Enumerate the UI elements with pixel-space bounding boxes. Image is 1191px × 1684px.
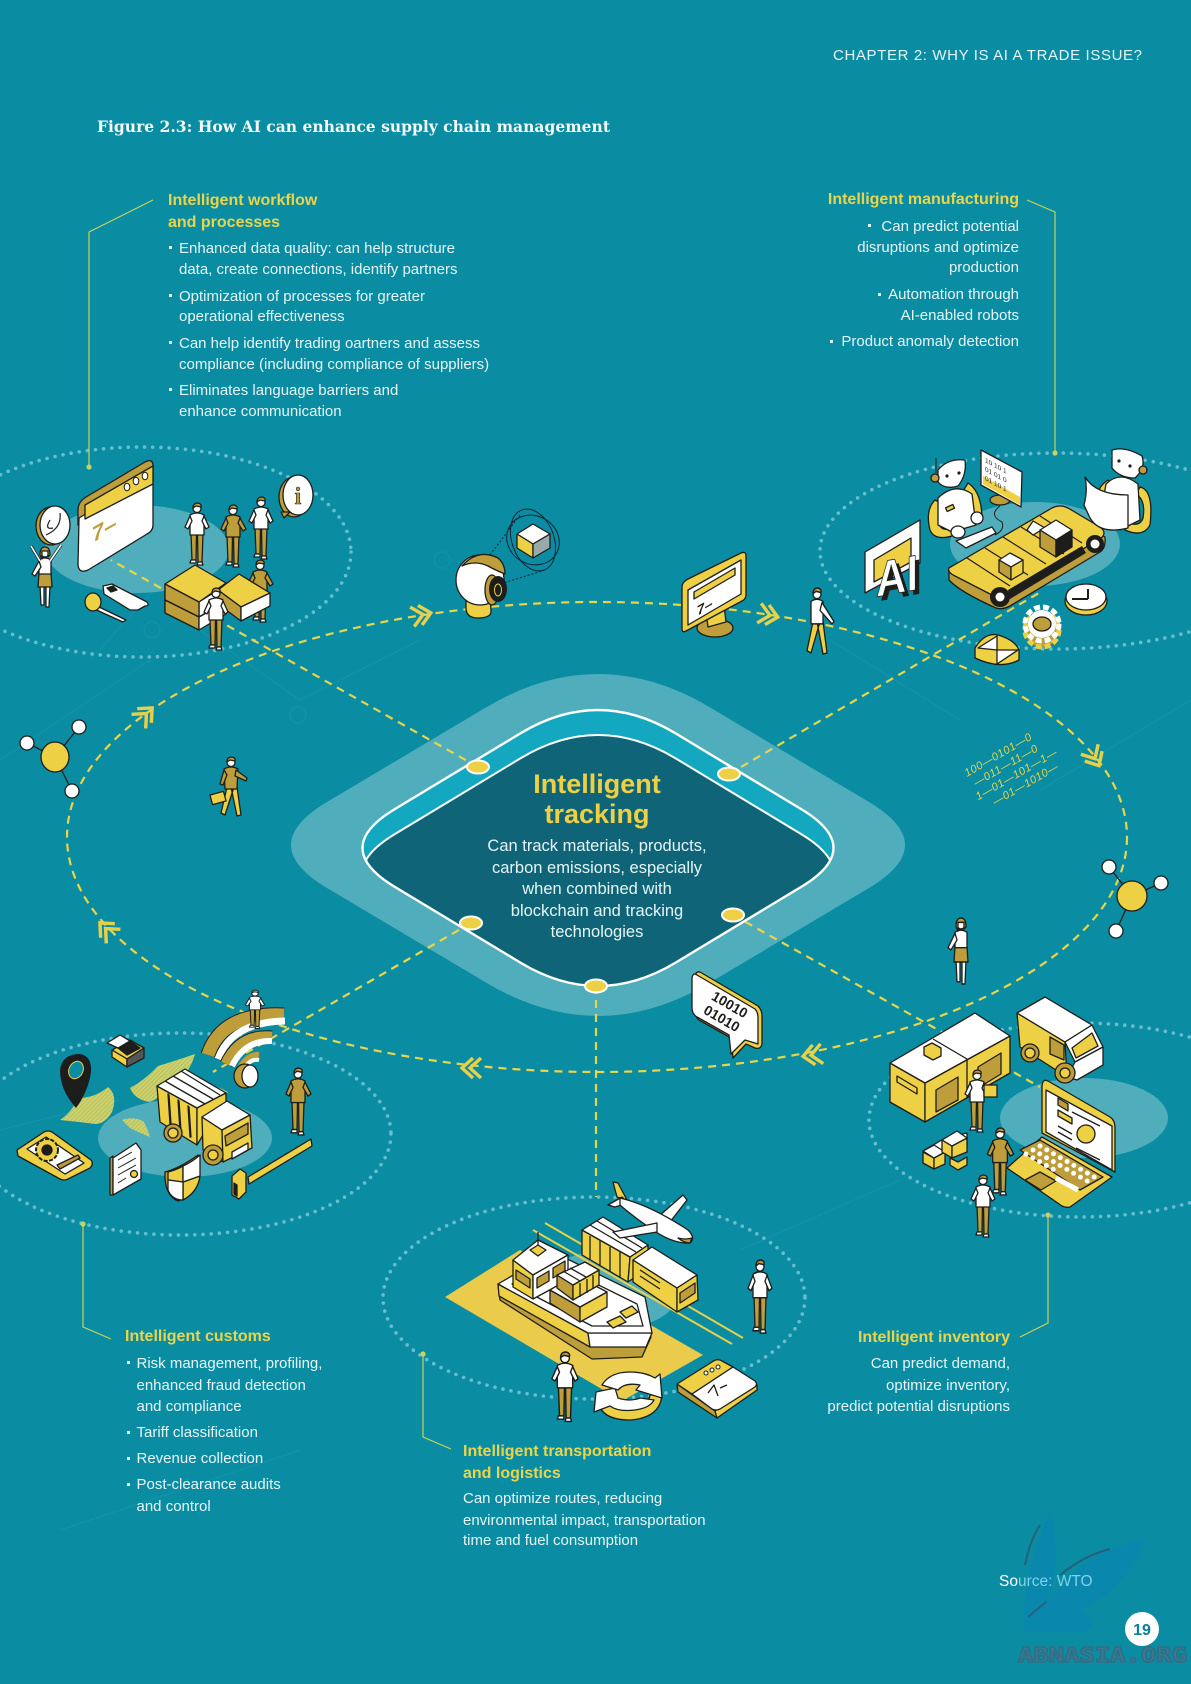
bullets: AI-enabled robots — [901, 307, 1019, 324]
centre description — [487, 837, 707, 941]
conveyor belt — [949, 506, 1105, 609]
cycle arrows — [594, 1372, 662, 1420]
robot with blueprint — [1084, 449, 1151, 533]
stand — [697, 619, 733, 637]
centre description: technologies — [551, 923, 643, 941]
data screen: 01 10 1 — [985, 475, 1007, 494]
body — [827, 1355, 1010, 1415]
binary stream: 1—01—101—1— — [974, 746, 1060, 803]
pale pad: workflow — [45, 505, 229, 593]
inspector man — [286, 1068, 311, 1135]
body: optimize inventory, — [886, 1377, 1010, 1394]
faint network pattern — [0, 540, 1191, 1530]
binary speech bubble — [692, 972, 762, 1058]
world map — [60, 1054, 228, 1137]
connector — [423, 1354, 451, 1449]
binary stream: 100—0101—0 — [963, 731, 1035, 780]
centre heading: Intelligent — [533, 769, 661, 799]
cube — [517, 524, 550, 558]
prompt glyph: 7– — [697, 595, 713, 620]
ring outline — [362, 710, 834, 986]
bullets — [127, 1355, 322, 1515]
lower containers — [550, 1290, 580, 1322]
pale pad: inventory — [1000, 1078, 1168, 1158]
application window — [78, 461, 153, 571]
walking man with briefcase — [210, 757, 247, 816]
centre description: carbon emissions, especially — [492, 859, 703, 877]
people at laptop — [971, 1128, 1014, 1237]
data screen: 10 10 1 — [985, 457, 1007, 476]
binary stream — [961, 724, 1067, 814]
dashed link: manufacturing to hub — [729, 593, 1039, 774]
chevron arrows on loop — [93, 603, 1108, 1078]
watermark butterfly — [1024, 1512, 1145, 1632]
cluster: manufacturing illustration — [865, 449, 1151, 665]
body — [463, 1490, 706, 1549]
text block: intelligent workflow: and processes — [168, 214, 280, 231]
heading: Intelligent manufacturing — [828, 191, 1019, 208]
deck crates — [607, 1316, 626, 1328]
central dashed supply chain loop — [67, 602, 1127, 1072]
text block: intelligent customs — [80, 1221, 322, 1515]
dotted zone ellipse: workflow — [0, 447, 351, 657]
molecule right — [1102, 860, 1168, 938]
bullets: Enhanced data quality: can help structure — [179, 240, 455, 257]
walking man on phone — [807, 588, 834, 654]
rail lines — [533, 1223, 743, 1344]
connector — [83, 1224, 111, 1339]
bezel — [682, 552, 746, 632]
bullets: Optimization of processes for greater — [179, 288, 425, 305]
laptop — [1007, 1080, 1115, 1207]
binary speech bubble: 10010 — [709, 988, 751, 1021]
cabin — [513, 1260, 533, 1299]
centre description: blockchain and tracking — [511, 902, 683, 920]
pale pad: manufacturing — [950, 502, 1120, 586]
yellow platform — [445, 1250, 703, 1401]
deck — [498, 1252, 652, 1333]
AI panel — [865, 520, 922, 612]
text block: intelligent workflow — [86, 192, 489, 470]
source note: Source: WTO — [999, 1573, 1093, 1590]
centre heading: tracking — [544, 799, 650, 829]
centre heading — [533, 769, 661, 829]
document — [110, 1143, 141, 1195]
pale pad: customs — [98, 1099, 272, 1177]
gear — [1025, 607, 1059, 647]
body: Can predict demand, — [871, 1355, 1010, 1372]
delivery van — [1017, 997, 1103, 1083]
orbit rings — [490, 503, 568, 585]
upper containers — [557, 1275, 573, 1300]
molecule left — [20, 720, 86, 798]
plane — [608, 1182, 693, 1243]
head — [456, 555, 504, 605]
text block: intelligent transportation and logistics — [420, 1351, 706, 1549]
server boxes — [165, 565, 270, 630]
bullets: enhanced fraud detection — [136, 1377, 306, 1394]
toll barrier — [232, 1139, 312, 1199]
bullets: Eliminates language barriers and — [179, 382, 398, 399]
bullets: compliance (including compliance of suppliers) — [179, 356, 489, 373]
bullets: and control — [136, 1498, 211, 1515]
tools — [85, 584, 148, 622]
chapter header: CHAPTER 2: WHY IS AI A TRADE ISSUE? — [833, 47, 1142, 64]
dotted zone ellipse: inventory — [869, 1023, 1191, 1217]
bullets: Tariff classification — [136, 1424, 258, 1441]
bullets: Can help identify trading oartners and assess — [179, 335, 480, 352]
cargo truck — [157, 1069, 252, 1165]
binary stream: —011—11—0 — [971, 742, 1041, 790]
outer pale diamond — [291, 674, 905, 1016]
freight truck — [582, 1217, 698, 1312]
arrow: upper left — [132, 701, 159, 728]
hull side — [498, 1284, 590, 1347]
arrow: top left — [410, 603, 433, 627]
dashed link: inventory to hub — [733, 915, 1040, 1087]
dark inner panel — [366, 734, 830, 984]
phone with gear — [17, 1131, 92, 1180]
team: standing men — [185, 497, 273, 622]
heading: Intelligent workflow — [168, 192, 318, 209]
bullets: Revenue collection — [136, 1450, 263, 1467]
application window: 7– — [92, 511, 116, 549]
heading: Intelligent inventory — [858, 1329, 1010, 1346]
parcels on belt — [999, 520, 1072, 580]
bullets: enhance communication — [179, 403, 342, 420]
arrow: lower left — [93, 916, 120, 943]
arrow: bottom — [462, 1058, 481, 1078]
info bubble: i — [295, 484, 302, 510]
hub node dots — [460, 760, 744, 992]
body: predict potential disruptions — [827, 1398, 1010, 1415]
data screen: 01 01 0 — [985, 466, 1007, 485]
bullets: and compliance — [136, 1398, 242, 1415]
bullets — [169, 240, 489, 420]
keyboard — [956, 527, 996, 548]
info bubble — [279, 475, 313, 518]
text block: intelligent manufacturing — [828, 191, 1058, 456]
figure title: Figure 2.3: How AI can enhance supply chain management — [97, 117, 611, 136]
ship — [498, 1232, 652, 1359]
robot operator — [928, 458, 983, 538]
bullets: production — [949, 259, 1019, 276]
arrow: bottom right — [802, 1044, 823, 1066]
connector — [89, 200, 153, 467]
bow front — [588, 1333, 652, 1347]
body: time and fuel consumption — [463, 1532, 638, 1549]
warehouse — [890, 1013, 1010, 1122]
bullets: operational effectiveness — [179, 308, 345, 325]
bullets: Can predict potential — [881, 218, 1019, 235]
connector — [1020, 1215, 1048, 1337]
open parcel — [107, 1035, 144, 1067]
arrow: right — [1081, 744, 1108, 771]
pie chip — [975, 635, 1019, 665]
bullets — [830, 218, 1019, 350]
teal ring shape — [362, 710, 834, 986]
stacked parcels — [923, 1131, 967, 1170]
dotted zone ellipse: transportation — [383, 1197, 805, 1399]
woman with tablet — [552, 1352, 578, 1421]
cluster: customs illustration — [17, 990, 312, 1201]
person on wifi — [245, 990, 265, 1028]
pilot man — [748, 1260, 772, 1333]
man carrying box — [965, 1070, 997, 1132]
bullets: Automation through — [888, 286, 1019, 303]
body: Can optimize routes, reducing — [463, 1490, 662, 1507]
lower hull — [498, 1284, 651, 1359]
page number badge — [1125, 1612, 1159, 1646]
heading: Intelligent transportation — [463, 1443, 651, 1460]
clock — [1065, 584, 1107, 615]
central diamond: intelligent tracking — [362, 710, 834, 1011]
centre description: when combined with — [521, 880, 672, 898]
wifi symbol — [208, 1015, 285, 1088]
woman cheering — [31, 545, 61, 607]
page number badge: 19 — [1133, 1622, 1151, 1639]
dotted zone ellipse: customs — [0, 1033, 391, 1235]
AI panel: AI — [876, 544, 918, 608]
dotted zone ellipse: manufacturing — [820, 453, 1191, 649]
binary speech bubble: 01010 — [701, 1002, 743, 1035]
bullets: Post-clearance audits — [136, 1476, 281, 1493]
dashed link: transportation to hub — [595, 986, 597, 1197]
dashed link: customs to hub — [213, 923, 471, 1072]
body: environmental impact, transportation — [463, 1512, 706, 1529]
desktop monitor — [682, 552, 746, 637]
lens — [489, 576, 507, 602]
bullets: disruptions and optimize — [857, 239, 1019, 256]
centre description: Can track materials, products, — [487, 837, 707, 855]
webcam and cube — [456, 503, 568, 618]
smile bubble — [36, 506, 70, 545]
cluster: workflow illustration — [31, 461, 313, 650]
location pin — [60, 1054, 91, 1108]
walking woman — [948, 918, 968, 984]
shield — [165, 1155, 200, 1201]
bullets: Risk management, profiling, — [136, 1355, 322, 1372]
man in front of boxes — [204, 588, 228, 650]
connector — [1027, 200, 1055, 453]
bullets: data, create connections, identify partners — [179, 261, 458, 278]
binary stream: —01—1010— — [990, 761, 1061, 809]
AI panel: AI — [880, 548, 922, 612]
bullets: Product anomaly detection — [841, 333, 1019, 350]
pale pad: transportation — [540, 1250, 680, 1330]
data screen — [981, 450, 1022, 535]
dashed link: workflow to hub — [111, 560, 478, 767]
cluster: inventory illustration — [890, 997, 1115, 1237]
heading: Intelligent customs — [125, 1328, 271, 1345]
watermark text: ABNASIA.ORG — [1018, 1643, 1187, 1667]
terminal tile — [677, 1360, 757, 1418]
stand — [466, 596, 491, 618]
arrow: top right — [757, 603, 780, 627]
screen — [688, 560, 741, 625]
text block: intelligent inventory — [827, 1212, 1051, 1415]
cluster: transportation illustration — [445, 1182, 772, 1421]
text block: intelligent transportation and logistics: and logistics — [463, 1465, 561, 1482]
